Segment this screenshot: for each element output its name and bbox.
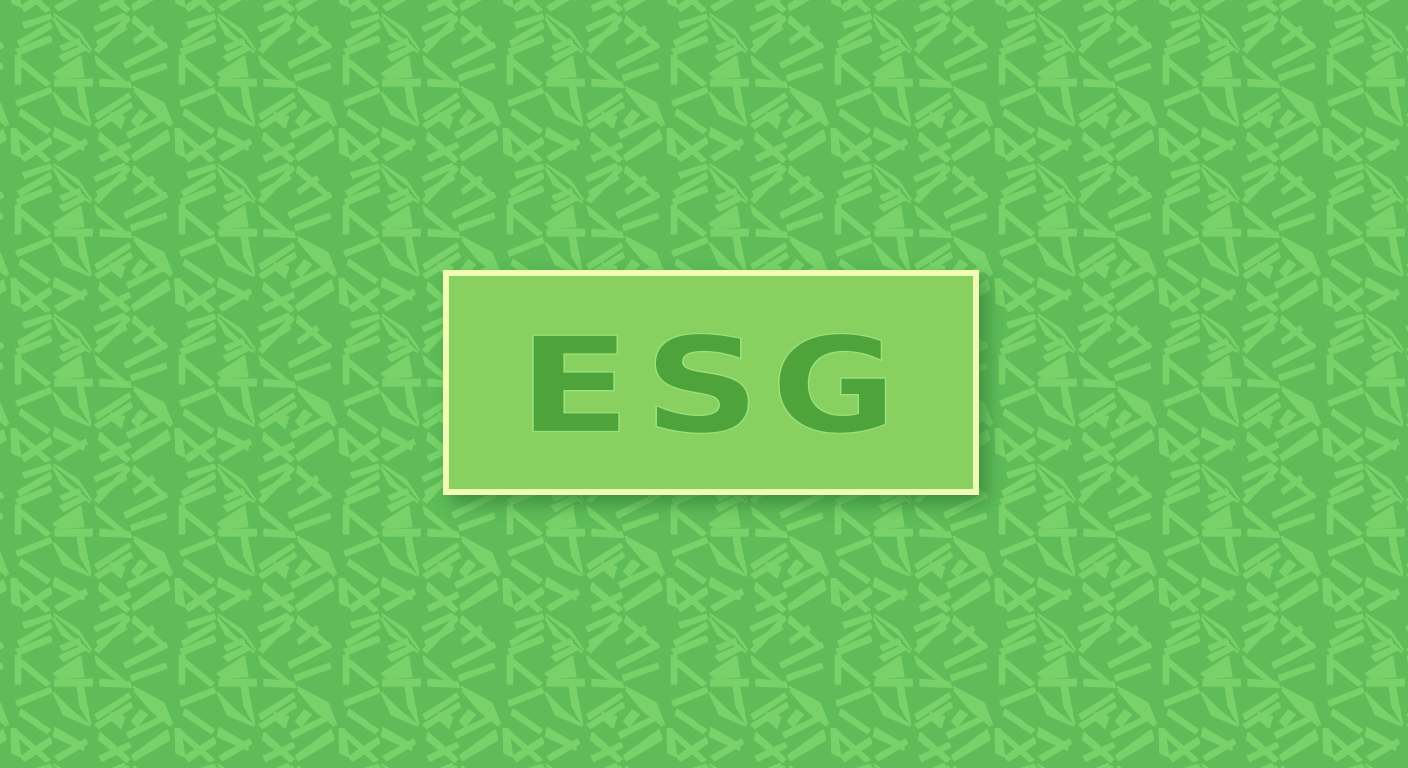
heading: ESG: E [518, 310, 631, 463]
heading: ESG [518, 309, 897, 463]
heading: ESG: S [644, 309, 760, 463]
heading: ESG: G [771, 309, 897, 463]
title box: ESG [442, 270, 996, 513]
